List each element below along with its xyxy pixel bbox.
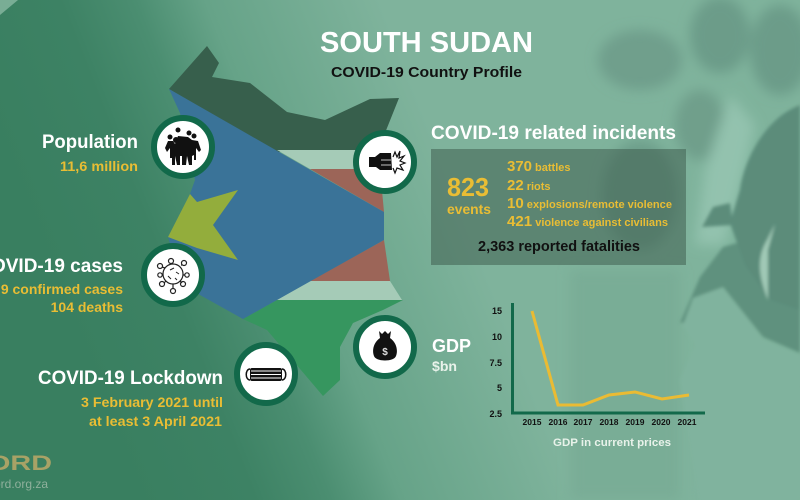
x axis labels: 2015 bbox=[523, 417, 542, 427]
incidents panel bbox=[431, 149, 686, 265]
incidents heading: COVID-19 related incidents bbox=[431, 123, 676, 144]
x axis labels: 2016 bbox=[549, 417, 568, 427]
population text bbox=[42, 132, 138, 174]
event breakdown: 370 battles bbox=[507, 158, 570, 175]
y axis labels bbox=[489, 306, 502, 419]
icon: population bbox=[154, 118, 212, 176]
x axis labels: 2019 bbox=[626, 417, 645, 427]
event breakdown bbox=[507, 158, 672, 230]
x axis labels: 2020 bbox=[652, 417, 671, 427]
map of South Sudan in flag colours bbox=[168, 46, 403, 396]
logo bbox=[0, 452, 52, 491]
chart caption: GDP in current prices bbox=[553, 437, 671, 449]
population text: 11,6 million bbox=[60, 158, 138, 174]
y axis labels: 7.5 bbox=[489, 358, 502, 368]
x axis labels: 2021 bbox=[678, 417, 697, 427]
head wrap bbox=[702, 203, 733, 227]
x axis labels bbox=[523, 417, 697, 427]
GDP heading: $bn bbox=[432, 358, 457, 374]
total events: 823 bbox=[447, 172, 489, 202]
COVID-19 cases text: 104 deaths bbox=[51, 299, 123, 315]
map: yellow star bbox=[168, 190, 238, 260]
icon: money bag bbox=[356, 318, 414, 376]
shirt shape bbox=[680, 287, 800, 500]
x axis labels: 2018 bbox=[600, 417, 619, 427]
map: upper white band bbox=[277, 150, 380, 169]
y axis labels: 10 bbox=[492, 332, 502, 342]
shoulder and neck bbox=[680, 240, 800, 353]
fatalities: 2,363 reported fatalities bbox=[478, 239, 640, 255]
icon: fist bbox=[356, 133, 414, 191]
x axis labels: 2017 bbox=[574, 417, 593, 427]
GDP line bbox=[532, 311, 689, 405]
icon: virus bbox=[144, 246, 202, 304]
lockdown text: at least 3 April 2021 bbox=[89, 413, 222, 429]
event breakdown: 421 violence against civilians bbox=[507, 213, 668, 230]
total events: events bbox=[447, 201, 491, 217]
COVID-19 cases text: 9 confirmed cases bbox=[1, 281, 123, 297]
map: upper red band bbox=[310, 169, 384, 212]
map: lower white band bbox=[277, 281, 402, 300]
GDP heading bbox=[432, 336, 471, 374]
event breakdown: 10 explosions/remote violence bbox=[507, 195, 672, 212]
map: blue triangle bbox=[168, 89, 384, 319]
map: lower red band bbox=[310, 240, 390, 281]
GDP heading: GDP bbox=[432, 336, 471, 356]
population text: Population bbox=[42, 132, 138, 153]
icon: money bag: $ bbox=[382, 347, 388, 358]
map: southern green area bbox=[243, 300, 403, 396]
lockdown text bbox=[38, 368, 223, 429]
head bbox=[730, 105, 800, 310]
y axis labels: 5 bbox=[497, 383, 502, 393]
event breakdown: 22 riots bbox=[507, 177, 551, 194]
lockdown text: 3 February 2021 until bbox=[81, 394, 223, 410]
face paint bbox=[760, 224, 775, 300]
line chart: GDP bbox=[489, 303, 705, 449]
y axis labels: 15 bbox=[492, 306, 502, 316]
y axis labels: 2.5 bbox=[489, 409, 502, 419]
map: dark northern band bbox=[169, 46, 399, 152]
COVID-19 cases text bbox=[0, 256, 123, 315]
icon: face mask bbox=[237, 345, 295, 403]
total events bbox=[447, 172, 491, 217]
lockdown text: COVID-19 Lockdown bbox=[38, 368, 223, 389]
subtitle: COVID-19 Country Profile bbox=[331, 65, 522, 81]
title: SOUTH SUDAN bbox=[320, 27, 533, 59]
